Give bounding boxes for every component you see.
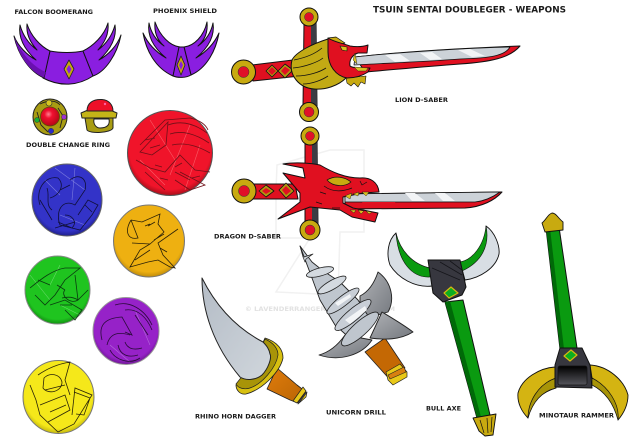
dragon d-saber label: DRAGON D-SABER	[214, 234, 281, 240]
watermark logo	[276, 150, 364, 295]
phoenix shield	[143, 22, 219, 77]
double change ring: side	[81, 99, 117, 132]
coin: green bull	[25, 256, 90, 324]
double change ring: front	[33, 99, 67, 135]
coin: red dragon	[128, 110, 212, 196]
unicorn drill label: UNICORN DRILL	[326, 410, 386, 416]
coin: orange unicorn	[114, 205, 184, 277]
lion d-saber label: LION D-SABER	[395, 97, 448, 104]
bull axe	[388, 226, 499, 436]
minotaur rammer label: MINOTAUR RAMMER	[539, 412, 614, 420]
title: TSUIN SENTAI DOUBLEGER - WEAPONS	[373, 6, 566, 16]
falcon boomerang	[14, 23, 121, 84]
bull axe label: BULL AXE	[426, 406, 461, 412]
dragon d-saber	[232, 127, 502, 240]
lion d-saber	[232, 8, 520, 122]
falcon boomerang label: FALCON BOOMERANG	[14, 8, 93, 16]
watermark text: © LAVENDERRANGER.DEVIANTART.COM	[245, 305, 395, 313]
double change ring label: DOUBLE CHANGE RING	[26, 141, 110, 149]
phoenix shield label: PHOENIX SHIELD	[153, 7, 217, 15]
rhino horn dagger label: RHINO HORN DAGGER	[195, 414, 276, 420]
rhino horn dagger	[202, 278, 307, 404]
unicorn drill	[300, 246, 413, 385]
coin: yellow tiger	[23, 360, 94, 434]
coin: blue	[32, 164, 102, 236]
coin: purple phoenix	[93, 298, 159, 364]
minotaur rammer	[518, 213, 628, 420]
